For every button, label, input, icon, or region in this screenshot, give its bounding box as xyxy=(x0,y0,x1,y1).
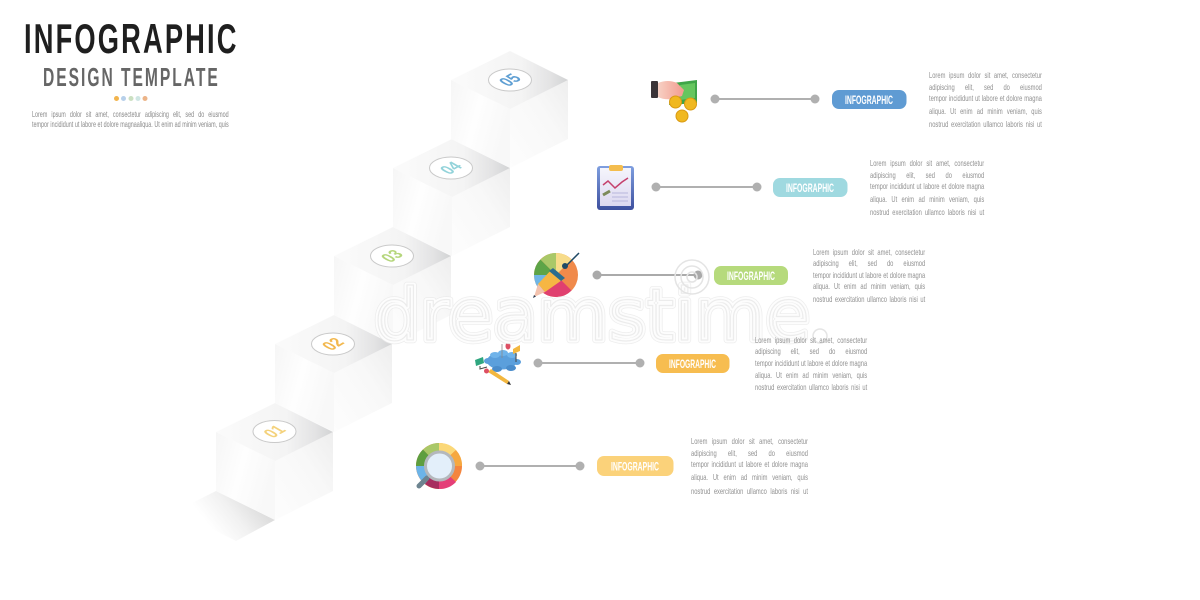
text block 2: aliqua. Ut enim ad minim veniam, quis xyxy=(755,370,867,380)
text block 1: aliqua. Ut enim ad minim veniam, quis xyxy=(691,472,808,482)
label pill 5 xyxy=(832,90,906,109)
text block 3: tempor incididunt ut labore et dolore magna xyxy=(813,270,925,280)
text block 3: adipiscing elit, sed do eiusmod xyxy=(813,258,925,268)
step 05 cube: 05 xyxy=(494,71,526,89)
step 01 cube: 01 xyxy=(259,423,290,440)
text block 4: nostrud exercitation ullamco laboris nisi ut xyxy=(870,207,984,217)
step 02 cube: 02 xyxy=(317,335,349,353)
text block 1: tempor incididunt ut labore et dolore magna xyxy=(691,459,808,469)
label pill 2 xyxy=(656,354,730,373)
connector 5 xyxy=(710,94,820,104)
text block 2: adipiscing elit, sed do eiusmod xyxy=(755,346,867,356)
label pill 3: INFOGRAPHIC xyxy=(727,269,775,283)
step 03 cube: 03 xyxy=(376,247,408,265)
text block 1: Lorem ipsum dolor sit amet, consectetur xyxy=(691,436,808,446)
label pill 5: INFOGRAPHIC xyxy=(845,93,893,107)
text block 2: nostrud exercitation ullamco laboris nisi ut xyxy=(755,382,867,392)
label pill 1: INFOGRAPHIC xyxy=(611,460,659,474)
text block 5: Lorem ipsum dolor sit amet, consectetur xyxy=(929,70,1042,80)
accent dots xyxy=(114,96,148,101)
step 04 cube xyxy=(393,139,510,256)
text block 1: nostrud exercitation ullamco laboris nisi ut xyxy=(691,486,808,496)
text block 4: Lorem ipsum dolor sit amet, consectetur xyxy=(870,158,984,168)
text block 5 xyxy=(929,70,1042,129)
text block 3 xyxy=(813,247,926,304)
text block 2: Lorem ipsum dolor sit amet, consectetur xyxy=(755,335,867,345)
text block 1: adipiscing elit, sed do eiusmod xyxy=(691,448,808,458)
icon: hand with money and coins xyxy=(651,80,697,122)
step 02 cube xyxy=(275,315,392,432)
text block 1 xyxy=(691,436,808,496)
text block 5: nostrud exercitation ullamco laboris nisi ut xyxy=(929,119,1042,129)
connector 4 xyxy=(652,182,762,192)
step 04 cube: 04 xyxy=(435,159,467,177)
connector 1 xyxy=(476,462,584,470)
icon: colour wheel with magnifier xyxy=(416,443,462,489)
text block 2: tempor incididunt ut labore et dolore magna xyxy=(755,358,867,368)
step 01 cube xyxy=(216,403,333,520)
step 03 cube xyxy=(334,227,451,344)
label pill 2: INFOGRAPHIC xyxy=(669,357,716,371)
label pill 3 xyxy=(714,266,788,285)
label pill 1 xyxy=(597,456,674,476)
intro text block: tempor incididunt ut labore et dolore magnaaliqua. Ut enim ad minim veniam, quis xyxy=(32,120,229,129)
text block 4: adipiscing elit, sed do eiusmod xyxy=(870,170,984,180)
text block 5: aliqua. Ut enim ad minim veniam, quis xyxy=(929,106,1042,116)
text block 4: aliqua. Ut enim ad minim veniam, quis xyxy=(870,194,984,204)
icon: clipboard with chart xyxy=(597,165,634,210)
watermark: dreamstime xyxy=(374,273,810,357)
text block 5: adipiscing elit, sed do eiusmod xyxy=(929,82,1042,92)
icon: colour wheel with pencil and pen nib xyxy=(533,253,579,298)
text block 5: tempor incididunt ut labore et dolore magna xyxy=(929,93,1042,103)
step 05 cube xyxy=(451,51,568,168)
watermark: dreamstime xyxy=(374,273,810,357)
floor shadow xyxy=(176,491,275,541)
intro text block xyxy=(32,110,229,129)
connector 2 xyxy=(534,358,644,368)
label pill 4: INFOGRAPHIC xyxy=(786,181,834,195)
subtitle: DESIGN TEMPLATE xyxy=(43,63,220,92)
text block 3: Lorem ipsum dolor sit amet, consectetur xyxy=(813,247,925,257)
intro text block: Lorem ipsum dolor sit amet, consectetur adipiscing elit, sed do eiusmod xyxy=(32,110,229,119)
title: INFOGRAPHIC xyxy=(24,15,239,62)
connector 3 xyxy=(592,270,702,280)
text block 4 xyxy=(870,158,984,217)
text block 2 xyxy=(755,335,868,392)
text block 4: tempor incididunt ut labore et dolore magna xyxy=(870,181,984,191)
watermark: dreamstime xyxy=(374,273,810,357)
icon: gear with flags and pencil xyxy=(475,342,521,385)
text block 3: aliqua. Ut enim ad minim veniam, quis xyxy=(813,281,925,291)
label pill 4 xyxy=(773,178,848,197)
text block 3: nostrud exercitation ullamco laboris nisi ut xyxy=(813,294,925,304)
